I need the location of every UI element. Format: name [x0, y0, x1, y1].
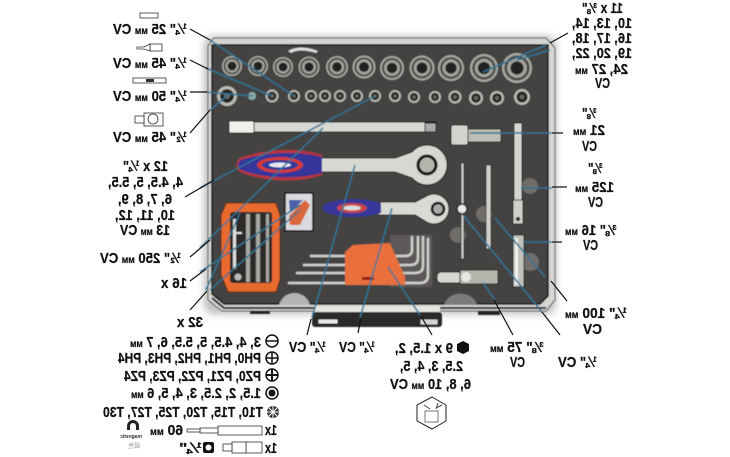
label: hex keys: 9 x 1.5, 2,	[395, 340, 453, 357]
icon: magnetic	[120, 420, 142, 450]
label: quarter inch 100 mm: CV	[583, 321, 602, 338]
icon: 50 mm holder	[133, 78, 166, 83]
case shadow	[204, 36, 556, 314]
label: 3/8 21 mm	[573, 105, 605, 155]
label: 11 sockets: 10, 13, 14,	[572, 15, 632, 32]
label: half inch 45 mm: ½" 45 мм CV	[113, 129, 187, 146]
label: 3/8 16 mm	[565, 222, 617, 254]
label: 16 x: 16 x	[160, 275, 187, 292]
label: 12 sockets: 10, 11, 12,	[115, 207, 175, 224]
icon: half inch socket adapter	[135, 113, 163, 126]
label: hex keys: 6, 8, 10 мм CV	[390, 376, 471, 393]
label: 3/8 75 mm	[490, 339, 544, 371]
label: quarter inch CV bottom 2: ¼" CV	[339, 339, 375, 356]
case inner tray	[212, 45, 548, 304]
label: 12 sockets	[108, 158, 183, 239]
label: hex keys: 2.5, 3, 4, 5,	[400, 358, 463, 375]
label: quarter inch 45 mm: ¼" 45 мм CV	[113, 55, 187, 72]
label: 11 sockets: 11 x ⅜"	[582, 0, 623, 17]
label: quarter inch 50 mm: ¼" 50 мм CV	[113, 88, 187, 105]
label: 3/8 125 mm: CV	[588, 194, 603, 211]
case outer shell	[208, 38, 555, 311]
label: 12 sockets: 13 мм CV	[120, 222, 170, 239]
label: 3/8 21 mm: 21 мм	[573, 122, 605, 139]
socket row 1	[222, 53, 532, 83]
icon: 25 mm bit	[140, 13, 158, 18]
label: 3/8 21 mm: ⅜"	[582, 105, 597, 122]
logo: hexagon stamp	[417, 397, 446, 429]
label: 11 sockets	[572, 0, 632, 92]
label: quarter inch CV bottom 1: ¼" CV	[289, 339, 326, 356]
large ratchet	[236, 145, 447, 185]
label: 11 sockets: 19, 20, 22,	[572, 45, 632, 62]
label: 11 sockets: 24, 27 мм	[575, 61, 628, 78]
label: 3/8 75 mm: ⅜" 75 мм	[490, 339, 544, 356]
label: 3/8 16 mm: CV	[583, 237, 598, 254]
bit list row: slotted: 3, 4, 4.5, 5, 5.5, 6, 7 мм	[130, 334, 261, 351]
icon: magnetic: 磁性	[128, 441, 140, 450]
extension bar	[229, 121, 436, 133]
bit list row: PH: PH0, PH1, PH2, PH3, PH4	[117, 350, 261, 367]
label: 12 sockets: 12 x ¼"	[123, 158, 168, 175]
label: 3/8 125 mm: ⅜"	[588, 160, 603, 177]
bit list row: PZ: PZ0, PZ1, PZ2, PZ3, PZ4	[123, 368, 261, 385]
carrying handle	[250, 306, 500, 327]
label: 12 sockets: 4, 4.5, 5, 5.5,	[108, 174, 183, 191]
16 mm deep socket	[513, 235, 524, 287]
top clip	[288, 48, 318, 53]
tray thumb cutouts	[279, 178, 539, 305]
label: 3/8 125 mm	[575, 160, 614, 211]
label: 1x quarter inch adapter	[179, 440, 277, 457]
bit holder	[221, 203, 280, 292]
label: 3/8 125 mm: 125 мм	[575, 179, 614, 196]
hex key set	[288, 235, 432, 287]
extension rods	[457, 163, 491, 259]
icon: magnetic: magnetic	[120, 434, 142, 440]
label: 32 x: 32 x	[176, 314, 203, 331]
label: 1x holder 60 mm	[150, 422, 277, 439]
label: quarter inch 100 mm: ¼" 100 мм	[565, 305, 627, 322]
label: 12 sockets: 6, 7, 8, 9,	[118, 191, 172, 208]
label: quarter inch 100 mm	[565, 305, 627, 338]
bit list row: torx: T10, T15, T20, T25, T27, T30	[103, 404, 263, 421]
label: 3/8 21 mm: CV	[582, 138, 597, 155]
black leader lines outside case	[185, 29, 568, 335]
icon: 45 mm adapter	[137, 44, 162, 51]
small ratchet	[322, 194, 449, 224]
label: hex keys	[390, 340, 471, 393]
bit list row: hex: 1.5, 2, 2.5, 3, 4, 5, 6 мм	[131, 385, 261, 402]
21 mm socket	[451, 125, 501, 145]
universal joint	[437, 270, 498, 284]
label: 3/8 16 mm: ⅜" 16 мм	[565, 222, 617, 239]
label: 1x holder 60 mm: 1x	[265, 422, 277, 439]
label: 3/8 75 mm: CV	[510, 354, 525, 371]
label: 11 sockets: 16, 17, 18,	[572, 30, 632, 47]
bit card	[285, 193, 313, 231]
label: half inch 250 mm: ½" 250 мм CV	[100, 250, 181, 267]
bottom rim	[212, 298, 546, 308]
label: 1x quarter inch adapter: ¼"	[179, 440, 202, 457]
label: 1x holder 60 mm: 60 мм	[150, 422, 183, 439]
label: 1x quarter inch adapter: 1x	[265, 440, 277, 457]
tool case	[200, 36, 556, 327]
socket row 2	[217, 86, 530, 106]
blue leader lines inside case	[200, 40, 552, 318]
T-bar	[513, 123, 523, 224]
label: quarter inch CV right: ¼" CV	[558, 354, 597, 371]
label: 11 sockets: CV	[595, 75, 610, 92]
label: quarter inch 25 mm: ¼" 25 мм CV	[113, 21, 187, 38]
